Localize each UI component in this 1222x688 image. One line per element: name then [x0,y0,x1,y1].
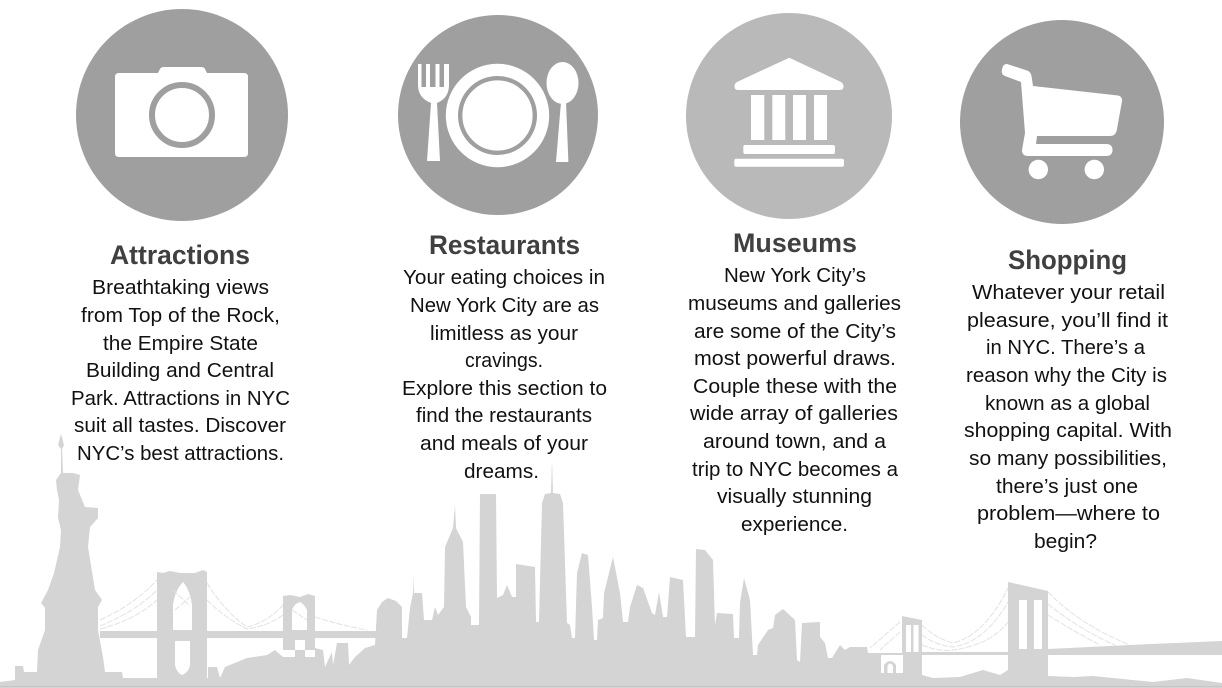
panel: museums [686,13,901,536]
text block: museums: New York City’s [724,264,866,287]
text block: restaurants: Your eating choices in [403,266,605,289]
heading: restaurants: Restaurants [429,230,580,260]
text block: shopping: shopping capital. With [964,419,1172,442]
text block: restaurants [402,266,607,483]
bottom edge line [0,686,1222,687]
text block: museums: visually stunning [717,485,872,508]
text block: restaurants: dreams. [464,460,539,483]
text block: museums: trip to NYC becomes a [692,458,899,481]
text block: museums: Couple these with the [693,375,897,398]
text block: museums: around town, and a [703,430,887,453]
text block: museums: wide array of galleries [689,402,898,425]
text block: shopping: in NYC. There’s a [986,336,1146,359]
statue of liberty [37,434,105,672]
text block: museums: experience. [741,513,848,536]
text block: museums: most powerful draws. [694,347,896,370]
text block: shopping: problem—where to [977,502,1160,525]
icon: shopping cart [960,20,1164,224]
icon: museum building [686,13,892,219]
icon: plate with fork and spoon [398,15,598,215]
text block: attractions: Breathtaking views [92,276,269,299]
heading: museums: Museums [733,228,857,258]
text block: attractions [71,276,290,465]
text block: museums: museums and galleries [688,292,901,315]
left bridge [100,570,378,678]
panel: shopping [960,20,1172,553]
text block: shopping: known as a global [985,392,1150,415]
bridge cables [100,580,1130,650]
text block: attractions: the Empire State [103,332,258,355]
small arch opening [888,664,893,673]
text block: shopping: pleasure, you’ll find it [967,309,1168,332]
icon: camera [76,9,288,221]
city skyline background [0,434,1222,688]
text block: restaurants: find the restaurants [416,404,592,427]
text block: shopping: begin? [1034,530,1097,553]
text block: restaurants: and meals of your [420,432,588,455]
text block: shopping: so many possibilities, [969,447,1167,470]
text block: shopping: there’s just one [996,475,1138,498]
heading: attractions: Attractions [110,240,250,270]
text block: restaurants: cravings. [465,349,543,372]
text block: shopping: Whatever your retail [972,281,1165,304]
text block: attractions: NYC’s best attractions. [77,442,284,465]
text block: restaurants: Explore this section to [402,377,607,400]
right bridge [868,582,1222,677]
skyline: ground and buildings [0,460,1222,688]
text block: museums: are some of the City’s [694,320,896,343]
text block: attractions: Park. Attractions in NYC [71,387,290,410]
panel: attractions [71,9,290,465]
text block: attractions: from Top of the Rock, [81,304,280,327]
text block: attractions: Building and Central [86,359,274,382]
text block: attractions: suit all tastes. Discover [74,414,286,437]
panel: restaurants [398,15,607,483]
text block: museums [688,264,901,536]
text block: restaurants: limitless as your [430,322,578,345]
text block: shopping: reason why the City is [966,364,1167,387]
text block: shopping [964,281,1172,553]
text block: restaurants: New York City are as [410,294,599,317]
heading: shopping: Shopping [1008,245,1127,275]
